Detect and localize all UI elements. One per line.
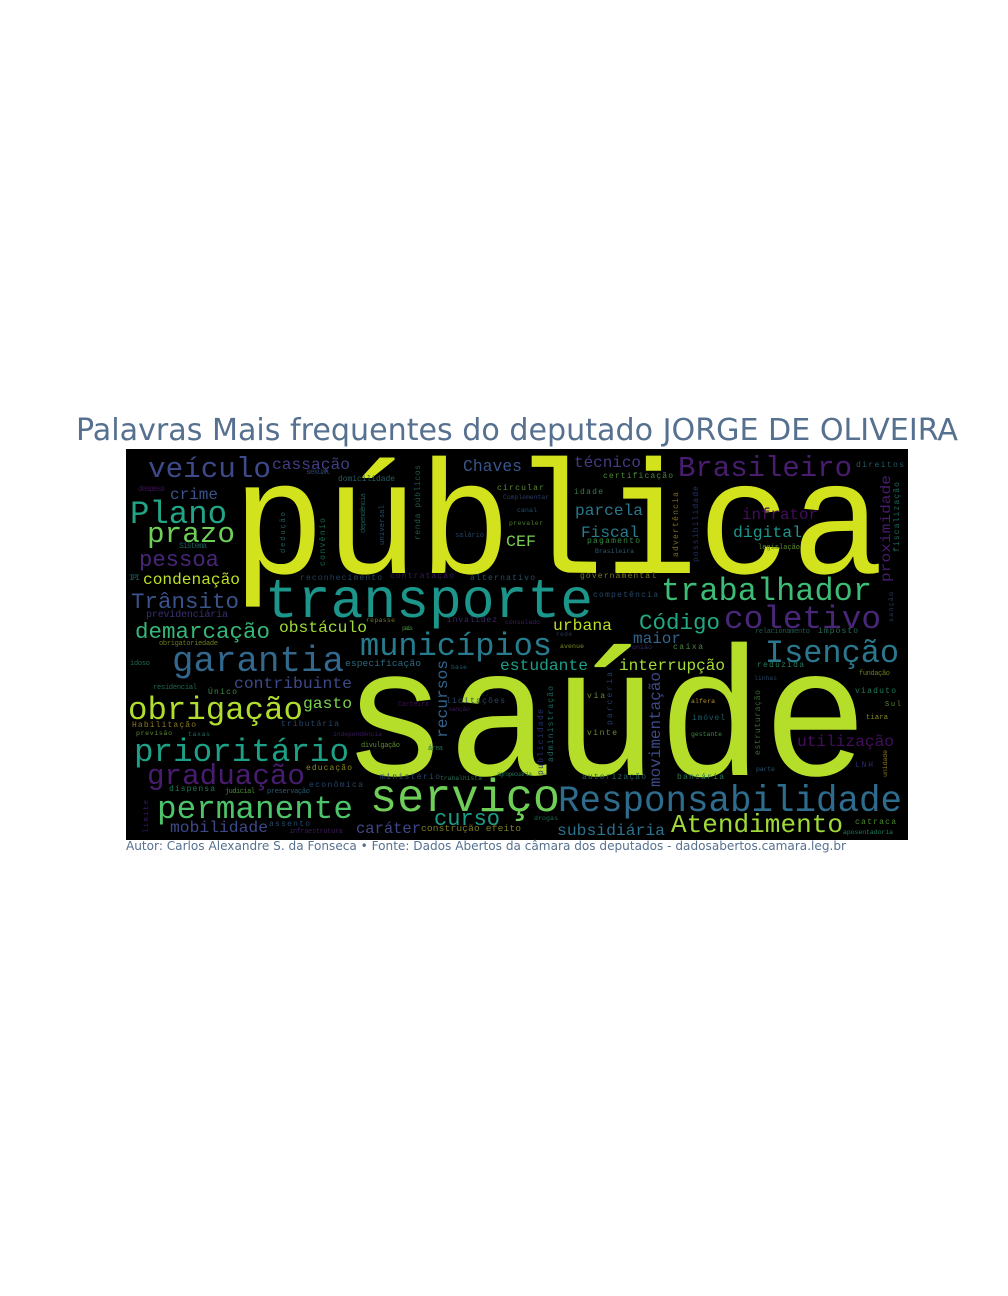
small words: base bbox=[451, 664, 467, 671]
small words: consulado bbox=[505, 619, 540, 626]
small words: via bbox=[587, 692, 605, 701]
small words: infraestrutura bbox=[289, 828, 343, 836]
small words: bancária bbox=[677, 773, 724, 782]
small words: avenue bbox=[560, 643, 584, 650]
medium words: veículo bbox=[148, 453, 271, 486]
word: saúde: saúde bbox=[342, 623, 868, 831]
small words: domicilidade bbox=[338, 475, 395, 484]
small words: ministério bbox=[380, 773, 440, 782]
small words: previsão bbox=[136, 730, 172, 737]
medium words: maior bbox=[633, 630, 681, 648]
small words: construção efeito bbox=[421, 823, 521, 834]
small words: advertência bbox=[672, 492, 681, 557]
small words: parceria bbox=[606, 672, 615, 725]
small words: residencial bbox=[153, 684, 197, 692]
small words: autorização bbox=[582, 773, 646, 782]
medium words: pessoa bbox=[139, 548, 219, 573]
small words: fiscalização bbox=[893, 482, 902, 552]
word cloud panel background bbox=[126, 449, 908, 840]
small words bbox=[129, 461, 904, 836]
medium words: parcela bbox=[575, 502, 643, 520]
small words: viaduto bbox=[855, 687, 896, 696]
small words: canal bbox=[517, 507, 537, 514]
medium words: prioritário bbox=[134, 734, 349, 771]
small words: linhas bbox=[754, 675, 777, 682]
small words: educação bbox=[306, 764, 352, 773]
medium words: digital bbox=[733, 524, 802, 542]
small words: idade bbox=[574, 488, 603, 497]
medium words: Isenção bbox=[765, 635, 899, 672]
small words: possibilidade bbox=[692, 486, 701, 562]
small words: caixa bbox=[673, 643, 703, 652]
medium words: Brasileiro bbox=[678, 452, 852, 485]
small words: circular bbox=[497, 484, 544, 493]
small words: Habilitação bbox=[132, 721, 196, 730]
small words: renda públicos bbox=[414, 465, 423, 540]
small words: unidade bbox=[882, 750, 889, 777]
medium words: mobilidade bbox=[170, 819, 268, 837]
small words: rede bbox=[556, 631, 572, 638]
medium words: proximidade bbox=[879, 475, 895, 582]
small words: trabalhista bbox=[440, 775, 482, 782]
small words: catraca bbox=[855, 818, 896, 827]
small words: competência bbox=[593, 591, 658, 600]
medium words: Fiscal bbox=[581, 524, 639, 542]
small words: tiara bbox=[866, 714, 888, 722]
small words: divulgação bbox=[361, 742, 400, 750]
medium words: estudante bbox=[500, 657, 588, 675]
word: serviço: serviço bbox=[370, 773, 560, 825]
small words: reduzida bbox=[757, 661, 804, 670]
medium words: coletivo bbox=[724, 601, 881, 638]
small words: agropecuária bbox=[497, 771, 532, 778]
title: Palavras Mais frequentes do deputado JORGE DE OLIVEIRA bbox=[76, 413, 958, 448]
small words: convênio bbox=[319, 518, 328, 566]
medium words: trabalhador bbox=[661, 573, 872, 610]
small words: judicial bbox=[225, 788, 255, 796]
medium words bbox=[128, 452, 899, 840]
small words: independência bbox=[333, 731, 382, 738]
medium words: cassação bbox=[272, 456, 350, 474]
small words: limite bbox=[143, 800, 151, 833]
small words: previdenciária bbox=[146, 609, 228, 621]
small words: sanção bbox=[448, 706, 470, 713]
medium words: movimentação bbox=[647, 672, 665, 787]
medium words: obrigação bbox=[128, 692, 303, 729]
medium words: prazo bbox=[147, 518, 235, 551]
medium words: municípios bbox=[360, 628, 552, 665]
word cloud bbox=[128, 438, 904, 840]
medium words: subsidiária bbox=[557, 822, 665, 840]
small words: publicidade bbox=[537, 709, 546, 775]
small words: certificação bbox=[603, 472, 673, 481]
medium words: utilização bbox=[797, 733, 894, 751]
medium words: recursos bbox=[434, 660, 452, 738]
medium words: contribuinte bbox=[234, 675, 352, 693]
medium words: interrupção bbox=[619, 657, 725, 675]
medium words: Plano bbox=[130, 496, 227, 533]
small words: Sistema bbox=[179, 542, 207, 551]
small words: econômica bbox=[309, 781, 363, 790]
medium words: técnico bbox=[574, 454, 641, 472]
small words: contratação bbox=[390, 572, 454, 581]
small words: legislação bbox=[758, 544, 800, 552]
medium words: crime bbox=[170, 486, 218, 504]
small words: Brasileira bbox=[595, 548, 634, 555]
small words: dedução bbox=[280, 512, 288, 553]
small words: idoso bbox=[130, 660, 150, 668]
small words: universal bbox=[379, 505, 387, 545]
medium words: Código bbox=[639, 611, 720, 636]
small words: prevaler bbox=[509, 520, 543, 527]
small words: Complementar bbox=[503, 494, 549, 501]
small words: administração bbox=[547, 686, 556, 762]
small words: dependência bbox=[360, 493, 368, 533]
small words: pagamento bbox=[587, 537, 640, 546]
small words: imposto bbox=[818, 627, 858, 636]
small words: especificação bbox=[345, 658, 421, 669]
footer credit: Autor: Carlos Alexandre S. da Fonseca • Fonte: Dados Abertos da câmara dos deputados - dadosabertos.camara.leg.br bbox=[126, 839, 846, 853]
small words: preservação bbox=[267, 788, 310, 796]
word: garantia: garantia bbox=[172, 641, 344, 682]
small words: gestante bbox=[691, 731, 722, 738]
small words: IPI bbox=[129, 574, 140, 583]
medium words: curso bbox=[434, 807, 500, 832]
medium words: CEF bbox=[506, 533, 536, 551]
small words: aposentadoria bbox=[843, 829, 893, 836]
small words: repasse bbox=[366, 617, 395, 624]
word: transporte: transporte bbox=[265, 570, 593, 634]
small words: despesa bbox=[138, 485, 165, 494]
small words: alternativo bbox=[470, 574, 535, 583]
small words: parte bbox=[756, 766, 775, 773]
small words: reconhecimento bbox=[300, 574, 382, 583]
small words: LNH bbox=[855, 761, 873, 770]
small words: governamental bbox=[580, 572, 656, 581]
small words: sanção bbox=[888, 592, 895, 622]
medium words: Trânsito bbox=[131, 590, 239, 615]
small words: Único bbox=[208, 687, 237, 697]
small words: fundação bbox=[859, 670, 890, 678]
small words: sexual bbox=[306, 468, 330, 477]
small words: estruturação bbox=[754, 690, 763, 755]
medium words: caráter bbox=[356, 820, 421, 838]
small words: salário bbox=[455, 532, 484, 540]
small words: drogas bbox=[534, 815, 558, 822]
small words: dispensa bbox=[169, 785, 215, 794]
small words: invalidez bbox=[447, 616, 497, 625]
medium words: condenação bbox=[143, 571, 240, 589]
small words: licitações bbox=[446, 697, 505, 706]
word: Responsabilidade: Responsabilidade bbox=[558, 781, 902, 823]
medium words: infrator bbox=[742, 506, 818, 524]
medium words: gasto bbox=[303, 695, 352, 713]
medium words: graduação bbox=[147, 760, 305, 793]
small words: país bbox=[402, 625, 413, 632]
small words: assento bbox=[269, 820, 310, 829]
small words: tributária bbox=[281, 720, 339, 729]
word: pública: pública bbox=[232, 438, 884, 622]
small words: Sul bbox=[885, 701, 901, 709]
medium words: permanente bbox=[157, 791, 353, 828]
medium words: obstáculo bbox=[279, 619, 367, 637]
small words: união bbox=[632, 644, 652, 651]
medium words: urbana bbox=[553, 617, 612, 635]
small words: relacionamento bbox=[755, 628, 810, 636]
small words: taxas bbox=[188, 731, 210, 738]
small words: Carteira bbox=[398, 701, 429, 709]
small words: vinte bbox=[587, 729, 617, 738]
medium words: Atendimento bbox=[671, 810, 843, 840]
small words: área bbox=[428, 745, 443, 753]
small words: alfera bbox=[691, 698, 715, 705]
small words: imóvel bbox=[692, 714, 725, 723]
medium words: Chaves bbox=[463, 457, 522, 476]
small words: obrigatoriedade bbox=[159, 640, 218, 648]
small words: direitos bbox=[856, 461, 904, 470]
medium words: demarcação bbox=[135, 620, 270, 645]
